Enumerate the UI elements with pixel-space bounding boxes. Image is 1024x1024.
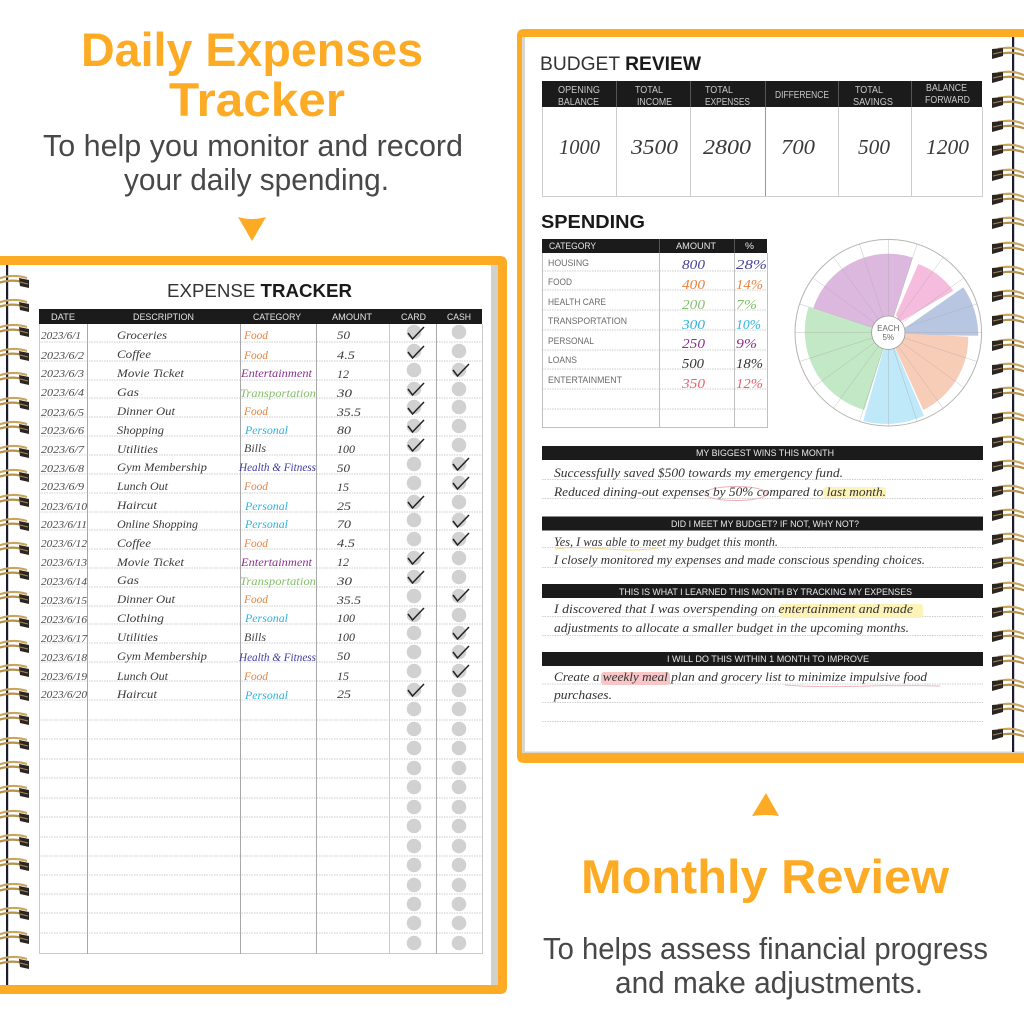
date column: 2023/6/17	[41, 634, 88, 645]
description column: Gas	[117, 385, 139, 399]
date column: 2023/6/16	[41, 615, 88, 626]
amount column: 35.5	[336, 593, 361, 607]
page paper	[0, 265, 498, 985]
description column: Lunch Out	[116, 479, 169, 493]
amount column: 12	[337, 555, 349, 569]
description column: Utilities	[117, 442, 158, 456]
spiral rings	[992, 48, 1024, 740]
wedge: peach	[888, 333, 968, 410]
spokes	[795, 239, 982, 426]
date column: 2023/6/14	[41, 577, 88, 588]
date column: 2023/6/19	[41, 672, 88, 683]
table header bar: AMOUNT	[332, 312, 372, 323]
section: what i will do: Create a weekly meal plan and grocery list to minimize impulsive food	[554, 669, 927, 684]
amount column: 35.5	[336, 405, 361, 419]
spending table: 12%	[736, 377, 763, 392]
budget summary table: 500	[858, 135, 891, 159]
category column: Food	[243, 592, 269, 606]
table header bar: CARD	[401, 312, 426, 323]
heading: daily expenses tracker	[81, 23, 423, 126]
amount column: 50	[337, 328, 350, 342]
category column: Personal	[244, 517, 289, 531]
section: did i meet my budget: Yes, I was able to meet my budget this month.	[554, 534, 778, 549]
budget summary table: BALANCE	[558, 97, 599, 108]
check marks	[408, 327, 469, 696]
budget summary table: 1200	[926, 135, 970, 159]
spending table: PERSONAL	[548, 336, 594, 347]
spending table: 300	[681, 318, 705, 333]
spending table: ENTERTAINMENT	[548, 375, 622, 386]
panel: expense tracker page	[0, 256, 507, 994]
description column: Groceries	[117, 328, 167, 342]
spending table: 400	[682, 278, 705, 293]
date column: 2023/6/12	[41, 539, 88, 550]
budget summary table: SAVINGS	[853, 97, 893, 108]
page title: BUDGET REVIEW	[540, 53, 702, 75]
amount column: 4.5	[337, 536, 355, 550]
category column: Bills	[244, 441, 266, 455]
date column: 2023/6/5	[41, 408, 84, 419]
budget summary table: DIFFERENCE	[775, 90, 829, 101]
spending table: %	[745, 241, 755, 252]
description column: Clothing	[117, 611, 164, 625]
amount column: 25	[337, 499, 351, 513]
spending table: 200	[682, 298, 705, 313]
panel: budget review page	[517, 29, 1024, 763]
amount column: 100	[337, 442, 355, 456]
description column: Online Shopping	[117, 517, 198, 531]
category column: Food	[243, 348, 269, 362]
budget summary table: TOTAL	[635, 85, 663, 96]
heading: monthly review: Monthly Review	[581, 850, 949, 903]
date column: 2023/6/10	[41, 502, 88, 513]
page edge shading	[491, 265, 498, 985]
amount column: 25	[337, 687, 351, 701]
amount column: 80	[337, 423, 351, 437]
amount column: 30	[336, 574, 352, 588]
date column: 2023/6/8	[41, 464, 85, 475]
budget summary table: OPENING	[558, 85, 600, 96]
page frame	[0, 256, 507, 994]
spending table: 350	[681, 377, 705, 392]
category column: Entertainment	[240, 366, 313, 380]
spending table: 250	[682, 337, 705, 352]
spending table: 28%	[736, 258, 767, 273]
spending table: HEALTH CARE	[548, 297, 606, 308]
budget summary table: 2800	[703, 135, 752, 159]
date column: 2023/6/13	[41, 558, 87, 569]
category column: Food	[243, 479, 269, 493]
description column: Gym Membership	[117, 460, 207, 474]
page title: EXPENSE TRACKER	[167, 280, 352, 301]
description column: Dinner Out	[116, 404, 176, 418]
wheel centre label: 5%	[883, 333, 894, 342]
date column: 2023/6/18	[41, 653, 88, 664]
spending table: 18%	[736, 357, 763, 372]
page edge shading	[522, 37, 1024, 753]
section: did i meet my budget	[542, 516, 983, 568]
wheel centre label: EACH	[877, 324, 900, 333]
category column: Food	[243, 404, 269, 418]
spending table: 500	[682, 357, 704, 372]
date column: 2023/6/4	[41, 388, 85, 399]
section: what i learned	[542, 584, 983, 636]
spending table: 7%	[736, 298, 757, 313]
spending table: 9%	[736, 337, 757, 352]
date column: 2023/6/1	[41, 331, 81, 342]
amount column: 12	[337, 367, 349, 381]
date column: 2023/6/6	[41, 426, 85, 437]
wedge: periwinkle	[905, 287, 978, 336]
spending table	[542, 239, 768, 428]
page frame	[517, 29, 1024, 763]
wedge: green	[805, 307, 888, 410]
description column: Lunch Out	[116, 669, 169, 683]
section: what i learned: I discovered that I was overspending on entertainment and made	[553, 601, 913, 616]
spending table: FOOD	[548, 277, 572, 288]
wedge: pink	[896, 264, 953, 322]
category column: Transportation	[240, 574, 316, 588]
budget summary table: 3500	[630, 135, 679, 159]
wheel centre label	[872, 316, 905, 349]
section: biggest wins	[542, 446, 983, 500]
date column: 2023/6/2	[41, 351, 85, 362]
amount column	[336, 328, 361, 701]
spiral rings	[0, 276, 29, 969]
description column	[116, 328, 207, 701]
amount column: 50	[337, 461, 350, 475]
category column: Personal	[244, 611, 289, 625]
spending heading: SPENDING	[541, 212, 645, 232]
description column: Gym Membership	[117, 649, 207, 663]
category column: Bills	[244, 630, 266, 644]
spending table: CATEGORY	[549, 241, 597, 252]
spending table: AMOUNT	[676, 241, 716, 252]
description column: Dinner Out	[116, 592, 176, 606]
date column: 2023/6/7	[41, 445, 85, 456]
amount column: 100	[337, 630, 355, 644]
category column	[238, 328, 316, 702]
date column: 2023/6/15	[41, 596, 87, 607]
table grid	[39, 324, 483, 954]
spending table: LOANS	[548, 355, 577, 366]
arrow: pointing down to tracker page	[238, 217, 266, 241]
budget summary table: TOTAL	[705, 85, 733, 96]
description column: Movie Ticket	[116, 555, 185, 569]
spending table: HOUSING	[548, 258, 589, 269]
page paper	[522, 37, 1024, 753]
text: daily tracker description: To help you monitor and record	[43, 128, 463, 163]
amount column: 50	[337, 649, 350, 663]
amount column: 30	[336, 386, 352, 400]
category column: Personal	[244, 423, 289, 437]
spiral spine	[1012, 37, 1014, 752]
description column: Haircut	[116, 687, 158, 701]
description column: Gas	[117, 573, 139, 587]
table header bar: CASH	[447, 312, 471, 323]
description column: Coffee	[117, 536, 152, 550]
description column: Haircut	[116, 498, 158, 512]
wedge: entertainment	[813, 254, 913, 333]
wheel outline	[795, 239, 982, 426]
table header bar	[39, 309, 482, 324]
budget summary table: EXPENSES	[705, 97, 750, 108]
section: what i will do	[542, 652, 983, 722]
category column: Food	[243, 328, 269, 342]
amount column: 70	[337, 517, 351, 531]
date column: 2023/6/9	[41, 482, 85, 493]
table header bar: CATEGORY	[253, 312, 302, 323]
budget summary table: 700	[781, 135, 816, 159]
spending table: 14%	[736, 278, 763, 293]
budget summary table: TOTAL	[855, 85, 883, 96]
budget summary table: BALANCE	[926, 83, 967, 94]
section: what i will do: purchases.	[553, 687, 612, 702]
budget summary table: INCOME	[637, 97, 672, 108]
text: monthly review description: and make adjustments.	[615, 965, 923, 1000]
spending table: TRANSPORTATION	[548, 316, 627, 327]
description column: Utilities	[117, 630, 158, 644]
description column: Coffee	[117, 347, 152, 361]
section: what i will do: I WILL DO THIS WITHIN 1 MONTH TO IMPROVE	[667, 654, 869, 665]
section: biggest wins: Reduced dining-out expenses by 50% compared to last month.	[553, 484, 886, 499]
spending table: 10%	[736, 318, 761, 333]
wedge: light blue	[863, 333, 924, 424]
category column: Health & Fitness	[238, 650, 316, 664]
amount column: 4.5	[337, 348, 355, 362]
amount column: 15	[337, 480, 349, 494]
category column: Health & Fitness	[238, 460, 316, 474]
category column: Food	[243, 536, 269, 550]
chart: spending pie wheel	[795, 239, 982, 426]
description column: Shopping	[117, 423, 164, 437]
date column: 2023/6/3	[41, 369, 84, 380]
section: what i learned: THIS IS WHAT I LEARNED THIS MONTH BY TRACKING MY EXPENSES	[619, 587, 912, 598]
text: monthly review description: To helps assess financial progress	[543, 931, 988, 966]
amount column: 15	[337, 669, 349, 683]
category column: Entertainment	[240, 555, 313, 569]
category column: Personal	[244, 499, 289, 513]
arrow: pointing up to review page	[752, 793, 779, 816]
table header bar: DESCRIPTION	[133, 312, 194, 323]
budget summary table: FORWARD	[925, 95, 970, 106]
category column: Personal	[244, 688, 289, 702]
spiral spine	[6, 265, 8, 985]
spending table: 800	[682, 258, 705, 273]
date column: 2023/6/11	[41, 520, 87, 531]
section: what i learned: adjustments to allocate a smaller budget in the upcoming months.	[554, 620, 909, 635]
section: did i meet my budget: DID I MEET MY BUDGET? IF NOT, WHY NOT?	[671, 519, 859, 530]
category column: Food	[243, 669, 269, 683]
text: daily tracker description: your daily spending.	[124, 162, 389, 197]
text: monthly review description	[543, 931, 988, 1000]
budget summary table: 1000	[559, 135, 600, 159]
section: did i meet my budget: I closely monitored my expenses and made conscious spending choices.	[553, 552, 925, 567]
budget summary table	[542, 81, 983, 196]
heading: daily expenses tracker: Daily Expenses	[81, 23, 423, 76]
amount column: 100	[337, 611, 355, 625]
description column: Movie Ticket	[116, 366, 185, 380]
section: biggest wins: Successfully saved $500 towards my emergency fund.	[554, 465, 843, 480]
table header bar: DATE	[51, 312, 75, 323]
checkbox circles	[414, 332, 459, 943]
date column: 2023/6/20	[41, 690, 88, 701]
category column: Transportation	[240, 386, 316, 400]
date column	[41, 331, 88, 701]
heading: daily expenses tracker: Tracker	[169, 73, 345, 126]
section: biggest wins: MY BIGGEST WINS THIS MONTH	[696, 448, 834, 459]
text: daily tracker description	[43, 128, 463, 197]
